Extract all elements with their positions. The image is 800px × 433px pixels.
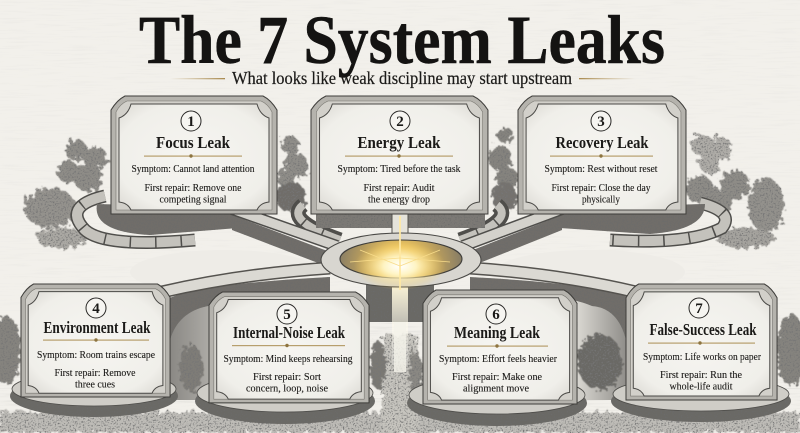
number 5: 5 (283, 307, 291, 323)
symptom: Symptom: Rest without reset (544, 163, 658, 175)
divider (447, 344, 548, 348)
symptom: Symptom: Tired before the task (338, 163, 461, 175)
heading: Recovery Leak (556, 133, 649, 152)
number 7: 7 (695, 301, 703, 317)
divider (648, 341, 755, 345)
fountain front wall (366, 278, 434, 372)
plant: boulders between panels 2 and 3 (492, 183, 518, 211)
plant: right rocks (715, 228, 775, 248)
first repair: competing signal (160, 194, 226, 206)
first repair: three cues (75, 378, 115, 390)
plants: upper foliage (24, 127, 784, 248)
divider (345, 154, 453, 158)
divider (43, 338, 149, 342)
terrace of panel 1 (77, 196, 238, 242)
plant: tree between panels 2 and 3 (488, 127, 518, 189)
first repair: First repair: Make one (452, 371, 542, 383)
first repair (452, 371, 542, 394)
plant: boulders between panels 1 and 2 (276, 182, 306, 212)
first repair (246, 371, 328, 394)
central basin (321, 216, 481, 290)
plant: left rocks (36, 228, 88, 248)
symptom: Symptom: Cannot land attention (132, 163, 255, 175)
first repair: First repair: Close the day (552, 182, 651, 194)
divider (550, 154, 653, 158)
plant: right tree (691, 134, 732, 174)
divider (232, 344, 345, 347)
plant: bush under channel left (179, 344, 203, 392)
heading: Environment Leak (44, 318, 151, 337)
plant: far right bottom bush (776, 314, 800, 386)
ground under the channels (0, 250, 800, 433)
plant: bush left of panel 6 (409, 350, 423, 394)
heading: Focus Leak (156, 133, 231, 152)
panel: environment leak (21, 284, 170, 397)
subtitle rule right (579, 78, 635, 79)
plant: large bush (578, 334, 622, 390)
first repair: alignment move (463, 382, 529, 394)
number 3: 3 (597, 114, 605, 130)
heading: Meaning Leak (454, 323, 541, 342)
panel: energy leak (311, 96, 488, 214)
first repair: First repair: Remove (54, 367, 136, 379)
heading: Internal-Noise Leak (233, 323, 346, 342)
panel: meaning leak (423, 290, 577, 404)
panel: focus leak (111, 96, 277, 214)
number 7 (689, 298, 709, 318)
symptom: Symptom: Effort feels heavier (439, 353, 557, 365)
number 2 (390, 111, 410, 131)
number 1 (181, 111, 201, 131)
first repair (364, 182, 434, 206)
plant: tree between panels 1 and 2 (277, 136, 308, 187)
heading: Energy Leak (358, 133, 441, 152)
subtitle rule left (170, 78, 225, 79)
symptom: Symptom: Mind keeps rehearsing (224, 353, 353, 365)
first repair (552, 182, 651, 206)
divider (144, 154, 242, 158)
symptom: Symptom: Room trains escape (37, 349, 155, 361)
number 3 (591, 111, 611, 131)
number 4: 4 (92, 301, 100, 317)
channel from panel 3 (463, 209, 562, 266)
first repair (144, 182, 242, 206)
heading: False-Success Leak (650, 320, 757, 339)
first repair: the energy drop (368, 194, 430, 206)
base ring of panel 7 (611, 377, 791, 422)
first repair: First repair: Sort (253, 371, 321, 383)
channel to panel 4 (162, 268, 330, 400)
first repair: whole-life audit (670, 380, 733, 392)
number 2: 2 (396, 114, 404, 130)
base ring of panel 6 (407, 376, 587, 426)
terrace of panel 3 (560, 203, 726, 241)
symptom: Symptom: Life works on paper (643, 351, 761, 363)
first repair (54, 367, 136, 390)
plant: right shrub (686, 170, 750, 212)
terrace of panel 2 (298, 205, 502, 240)
panel: internal-noise leak (209, 292, 369, 403)
panel: false-success leak (626, 284, 777, 400)
panel: recovery leak (518, 96, 686, 214)
plant: bush right of panel 5 (370, 341, 386, 389)
plants: lower foliage (0, 314, 800, 394)
channel to panel 7 (470, 268, 636, 400)
first repair: physically (582, 194, 621, 206)
base ring of panel 5 (195, 374, 375, 424)
title: The 7 System Leaks (139, 2, 665, 78)
subtitle: What looks like weak discipline may start upstream (232, 68, 572, 88)
first repair: First repair: Audit (364, 182, 434, 194)
number 4 (86, 298, 106, 318)
first repair: First repair: Run the (660, 369, 742, 381)
channel from panel 2 (392, 208, 408, 240)
number 5 (277, 304, 297, 324)
first repair: First repair: Remove one (144, 182, 242, 194)
plant: left bush (24, 188, 76, 228)
base ring of panel 4 (10, 372, 178, 417)
channel from panel 1 (232, 209, 337, 266)
number 1: 1 (187, 114, 195, 130)
number 6: 6 (492, 307, 500, 323)
plant: far left bottom bush (0, 316, 21, 384)
plant: right grass (748, 178, 784, 232)
plant: left tree (57, 139, 107, 192)
first repair: concern, loop, noise (246, 382, 328, 394)
first repair (660, 369, 742, 392)
number 6 (486, 304, 506, 324)
